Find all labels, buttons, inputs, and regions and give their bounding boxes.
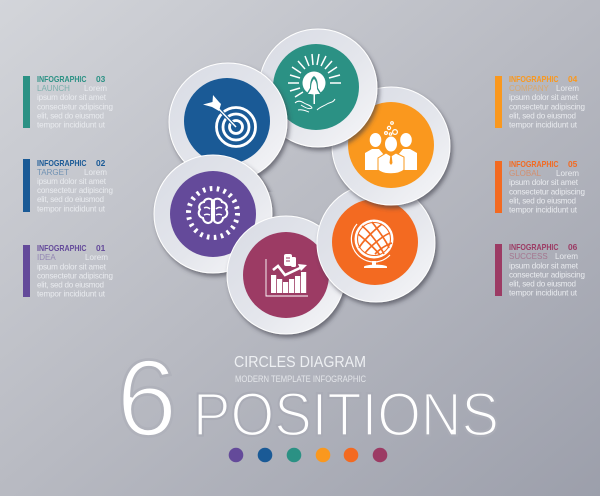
right label: global 05: elit, sed do eiusmod: [509, 196, 576, 206]
left label: target 02: INFOGRAPHIC: [37, 158, 86, 168]
left label: idea 01: ipsum dolor sit amet: [37, 262, 107, 272]
right label: global 05: [495, 159, 585, 214]
right label: success 06: Lorem: [555, 252, 578, 261]
heading: positions: POSITIONS: [193, 380, 499, 448]
right label: global 05: 05: [568, 159, 578, 169]
heading: circles diagram: CIRCLES DIAGRAM: [234, 354, 366, 371]
right label: company 04: Lorem: [556, 84, 579, 93]
circle: company team amber: [332, 87, 450, 205]
right label: company 04: ipsum dolor sit amet: [509, 93, 579, 102]
right label: company 04: 04: [568, 74, 578, 84]
icon: brain: [188, 188, 238, 238]
left label: idea 01: consectetur adipiscing: [37, 272, 113, 280]
right label: success 06: tempor incididunt ut: [509, 288, 578, 298]
circle: target blue: [169, 63, 287, 181]
left label: launch 03: LAUNCH: [37, 84, 70, 93]
left label: idea 01: Lorem: [85, 253, 108, 262]
right label: success 06: SUCCESS: [509, 252, 548, 261]
left label: target 02: elit, sed do eiusmod: [37, 195, 104, 204]
right label: success 06: 06: [568, 242, 578, 252]
left label: idea 01: IDEA: [37, 253, 56, 262]
left label: launch 03: INFOGRAPHIC: [37, 74, 86, 84]
icon: rocket: [288, 54, 341, 112]
left label: launch 03: consectetur adipiscing: [37, 102, 113, 112]
left label: target 02: tempor incididunt ut: [37, 204, 106, 214]
left label: target 02: [23, 158, 113, 214]
icon: target: [203, 95, 256, 146]
left label: launch 03: 03: [96, 74, 106, 84]
left label: target 02: consectetur adipiscing: [37, 186, 113, 195]
numeral 6: 6: [116, 338, 177, 460]
right label: company 04: consectetur adipiscing: [509, 102, 585, 112]
circle: launch rocket teal: [259, 29, 377, 147]
right label: success 06: [495, 242, 585, 298]
right label: success 06: INFOGRAPHIC: [509, 242, 558, 252]
circle: success chart crimson: [227, 216, 345, 334]
right label: company 04: tempor incididunt ut: [509, 120, 578, 130]
left label: target 02: ipsum dolor sit amet: [37, 177, 107, 186]
right label: global 05: tempor incididunt ut: [509, 206, 578, 214]
icon: globe: [351, 220, 394, 268]
left label: launch 03: ipsum dolor sit amet: [37, 93, 107, 102]
left label: idea 01: elit, sed do eiusmod: [37, 280, 104, 290]
right label: global 05: consectetur adipiscing: [509, 188, 585, 196]
circle: idea brain purple: [154, 155, 272, 273]
right label: company 04: [495, 74, 585, 130]
right label: company 04: INFOGRAPHIC: [509, 74, 558, 84]
right label: company 04: elit, sed do eiusmod: [509, 112, 576, 120]
right label: success 06: elit, sed do eiusmod: [509, 280, 576, 288]
left label: launch 03: tempor incididunt ut: [37, 120, 106, 130]
right label: global 05: ipsum dolor sit amet: [509, 178, 579, 187]
circle: global globe orange: [317, 184, 435, 302]
legend dots: [229, 448, 387, 462]
right label: global 05: GLOBAL: [509, 169, 542, 178]
left label: target 02: TARGET: [37, 168, 69, 177]
subheading: modern template infographic: MODERN TEMPLATE INFOGRAPHIC: [235, 374, 366, 384]
right label: global 05: Lorem: [556, 169, 579, 178]
left label: launch 03: Lorem: [84, 84, 107, 93]
right label: company 04: COMPANY: [509, 84, 550, 93]
right label: global 05: INFOGRAPHIC: [509, 159, 558, 169]
left label: target 02: 02: [96, 158, 106, 168]
left label: idea 01: [23, 243, 113, 298]
left label: idea 01: INFOGRAPHIC: [37, 243, 86, 253]
left label: target 02: Lorem: [84, 168, 107, 177]
left label: idea 01: tempor incididunt ut: [37, 290, 106, 298]
right label: success 06: ipsum dolor sit amet: [509, 262, 579, 270]
icon: growth chart: [266, 254, 308, 296]
purple ring overlap over target circle: [158, 154, 272, 192]
right label: success 06: consectetur adipiscing: [509, 270, 585, 280]
left label: idea 01: 01: [96, 243, 106, 253]
icon: team: [365, 122, 417, 174]
left label: launch 03: [23, 74, 113, 130]
left label: launch 03: elit, sed do eiusmod: [37, 112, 104, 120]
